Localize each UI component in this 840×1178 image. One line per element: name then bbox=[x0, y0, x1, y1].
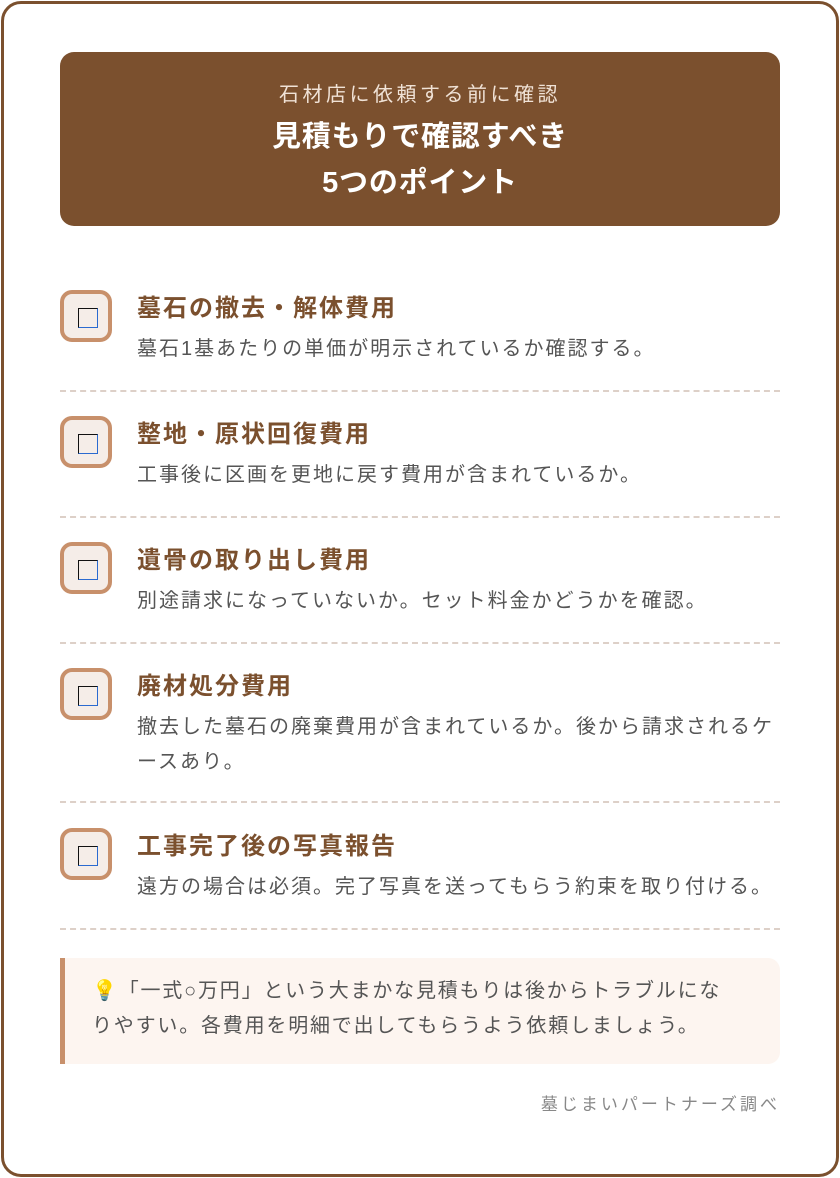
item description: 墓石1基あたりの単価が明示されているか確認する。 bbox=[137, 338, 656, 360]
callout: 💡「一式○万円」という大まかな見積もりは後からトラブルになりやすい。各費用を明細で出してもらうよう依頼しましょう。 bbox=[92, 980, 721, 1037]
icon: checkbox bbox=[60, 290, 112, 342]
header bbox=[60, 52, 780, 226]
title: 見積もりで確認すべき bbox=[272, 121, 568, 153]
title: 5つのポイント bbox=[322, 167, 518, 199]
icon: checkbox bbox=[60, 542, 112, 594]
item title: 整地・原状回復費用 bbox=[137, 421, 371, 448]
subtitle: 石材店に依頼する前に確認 bbox=[279, 84, 561, 106]
icon: checkbox bbox=[60, 668, 112, 720]
footer source: 墓じまいパートナーズ調べ bbox=[541, 1095, 780, 1114]
icon: checkbox bbox=[60, 416, 112, 468]
item 2 bbox=[60, 416, 642, 486]
item 1 bbox=[60, 290, 656, 360]
item title: 工事完了後の写真報告 bbox=[137, 833, 397, 860]
item 3 bbox=[60, 542, 708, 612]
title bbox=[272, 121, 568, 199]
item description: 工事後に区画を更地に戻す費用が含まれているか。 bbox=[137, 464, 642, 486]
item 5 bbox=[60, 828, 773, 898]
icon: checkbox bbox=[60, 828, 112, 880]
item title: 墓石の撤去・解体費用 bbox=[137, 295, 397, 322]
item title: 廃材処分費用 bbox=[137, 673, 293, 700]
item title: 遺骨の取り出し費用 bbox=[137, 547, 371, 574]
callout bbox=[60, 958, 780, 1064]
item description: 遠方の場合は必須。完了写真を送ってもらう約束を取り付ける。 bbox=[137, 876, 773, 898]
item description: 撤去した墓石の廃棄費用が含まれているか。後から請求されるケースあり。 bbox=[137, 716, 774, 773]
item 4 bbox=[60, 668, 774, 773]
item description: 別途請求になっていないか。セット料金かどうかを確認。 bbox=[137, 590, 708, 612]
